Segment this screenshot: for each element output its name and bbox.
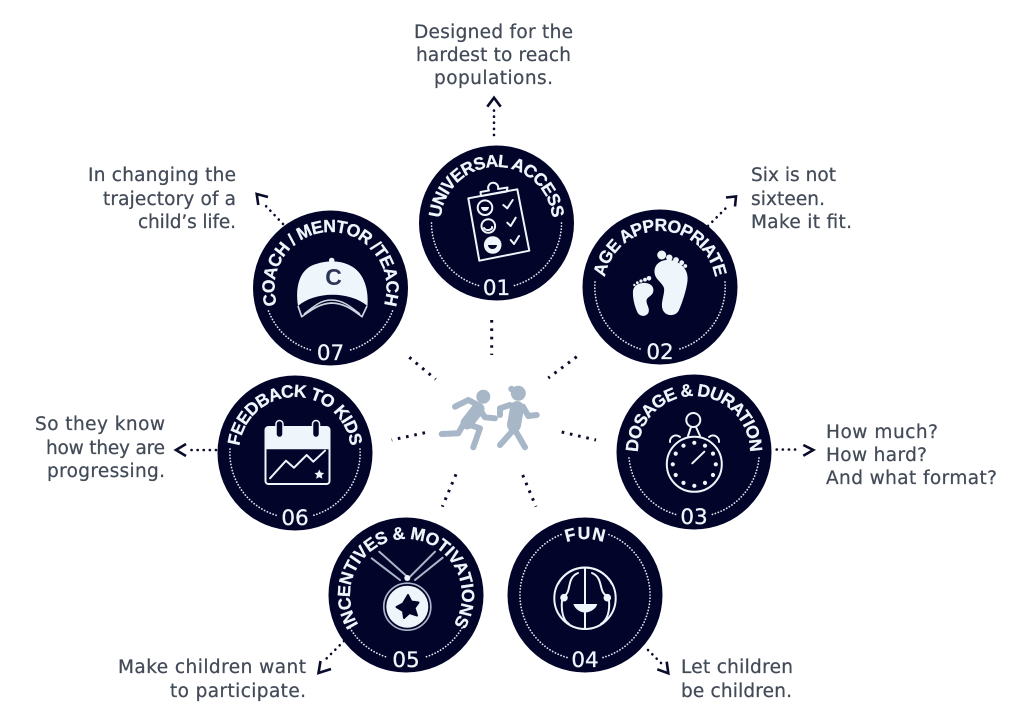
panel: badge 06 feedback to kids: 06 [281, 506, 309, 531]
icon: calendar with rising chart [265, 420, 330, 484]
text: dosage note: And what format? [826, 468, 997, 489]
panel: badge 02 age appropriate: 02 [646, 340, 674, 365]
text: fun note: Let children [681, 657, 793, 678]
panel: badge 01 universal access [419, 146, 574, 301]
panel: badge 02 age appropriate [582, 210, 738, 365]
text: fun note: be children. [681, 681, 792, 702]
text: dosage note: How hard? [826, 445, 927, 466]
text: universal access note: hardest to reach [416, 45, 571, 66]
panel: badge 04 fun: FUN [564, 526, 606, 542]
text: incentives note: to participate. [170, 681, 306, 702]
text: age appropriate note: Make it fit. [751, 212, 852, 233]
text: age appropriate note: sixteen. [751, 189, 825, 210]
icon: baseball cap [297, 258, 368, 317]
icon: footprints [633, 250, 688, 316]
text: feedback note: So they know [35, 414, 165, 435]
text: universal access note: Designed for the [414, 22, 573, 43]
panel: badge 07 coach mentor teach [253, 210, 408, 366]
icon: baseball cap: C [325, 264, 342, 290]
text: feedback note: progressing. [47, 461, 165, 482]
panel: badge 07 coach mentor teach: COACH / MENTOR /TEACH [262, 220, 399, 306]
panel: badge 05 incentives and motivations: INCENTIVES & MOTIVATIONS [338, 526, 474, 630]
text: feedback note: how they are [46, 438, 165, 459]
panel: badge 05 incentives and motivations: 05 [392, 648, 420, 673]
text: coach note: In changing the [88, 165, 236, 186]
arrow: up right from badge 02 [708, 196, 736, 226]
panel: badge 04 fun [508, 518, 662, 673]
arrow: up left from badge 07 [257, 194, 283, 224]
panel: badge 03 dosage and duration: DOSAGE & DURATION [626, 384, 762, 452]
arrow: down left from badge 05 [318, 641, 344, 673]
arrow: up from badge 01 [487, 98, 501, 135]
icon: basketball face [554, 568, 616, 629]
text: universal access note: populations. [434, 68, 553, 89]
panel: badge 06 feedback to kids [218, 376, 372, 531]
text: incentives note: Make children want [118, 657, 306, 678]
panel: badge 05 incentives and motivations [328, 518, 484, 673]
arrow: left from badge 06 [176, 444, 216, 456]
radial dotted spokes [392, 320, 596, 507]
panel: badge 01 universal access: 01 [483, 276, 510, 301]
panel: badge 04 fun: 04 [571, 648, 599, 673]
text: coach note: trajectory of a [103, 189, 236, 210]
panel: badge 06 feedback to kids: FEEDBACK TO KIDS [227, 384, 362, 446]
icon: stopwatch [667, 413, 722, 492]
text: dosage note: How much? [826, 422, 938, 443]
text: coach note: child’s life. [138, 212, 236, 233]
panel: badge 01 universal access: UNIVERSAL ACCESS [428, 154, 564, 217]
panel: badge 02 age appropriate: AGE APPROPRIATE [594, 218, 727, 277]
icon: running children [442, 386, 537, 447]
text: age appropriate note: Six is not [751, 165, 836, 186]
panel: badge 03 dosage and duration [616, 374, 772, 530]
panel: badge 07 coach mentor teach: 07 [317, 341, 344, 366]
icon: medal with star [372, 552, 443, 630]
panel: badge 03 dosage and duration: 03 [680, 505, 708, 530]
arrow: down right from badge 04 [648, 650, 668, 673]
arrow: right from badge 03 [777, 445, 813, 456]
icon: clipboard with faces [468, 183, 529, 261]
